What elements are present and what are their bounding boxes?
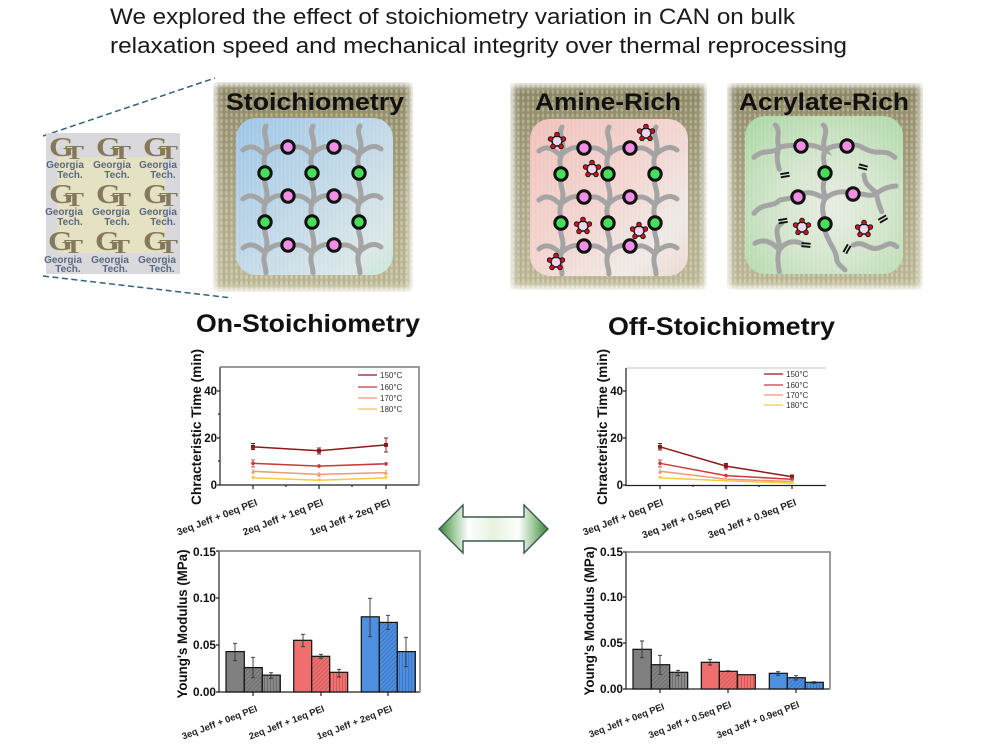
- bar chart: on-stoichiometry young's modulus: 3eq Jeff + 0eq PEI: [180, 703, 259, 742]
- legend: 150°C: [786, 370, 809, 379]
- photo: Georgia Tech logo sheet under film: Georgia: [139, 207, 177, 218]
- line chart: off-stoichiometry characteristic time: [581, 349, 826, 541]
- title: relaxation speed and mechanical integrity over thermal reprocessing: [110, 33, 847, 58]
- photo: Georgia Tech logo sheet under film: Georgia: [139, 160, 177, 171]
- bar chart: on-stoichiometry young's modulus: 0.10: [193, 591, 216, 605]
- bar chart: on-stoichiometry young's modulus: 0.00: [193, 685, 216, 699]
- photo: Georgia Tech logo sheet under film: Georgia: [93, 160, 131, 171]
- photo: Georgia Tech logo sheet under film: Georgia: [45, 207, 83, 218]
- bar chart: on-stoichiometry young's modulus: Young's Modulus (MPa): [174, 550, 190, 698]
- bar chart: off-stoichiometry young's modulus: 3eq Jeff + 0eq PEI: [587, 701, 666, 740]
- bar chart: off-stoichiometry young's modulus: 3eq Jeff + 0.9eq PEI: [715, 699, 801, 740]
- line chart: off-stoichiometry characteristic time: 3eq Jeff + 0.9eq PEI: [707, 497, 798, 541]
- line chart: on-stoichiometry characteristic time: Chracteristic Time (min): [188, 349, 204, 505]
- line chart: on-stoichiometry characteristic time: 2eq Jeff + 1eq PEI: [241, 497, 325, 538]
- bar chart: off-stoichiometry young's modulus: Young's Modulus (MPa): [581, 546, 597, 696]
- bar chart: off-stoichiometry young's modulus: 0.15: [600, 545, 623, 559]
- bar chart: on-stoichiometry young's modulus: 1eq Jeff + 2eq PEI: [315, 703, 394, 742]
- photo: Georgia Tech logo sheet under film: [44, 132, 180, 275]
- line chart: on-stoichiometry characteristic time: 3eq Jeff + 0eq PEI: [175, 497, 259, 538]
- line chart: off-stoichiometry characteristic time: 40: [610, 386, 623, 398]
- bar chart: off-stoichiometry young's modulus: 3eq Jeff + 0.5eq PEI: [647, 699, 733, 740]
- legend: 160°C: [380, 383, 403, 392]
- line chart: off-stoichiometry characteristic time: 0: [617, 480, 623, 492]
- bar chart: on-stoichiometry young's modulus: [174, 545, 420, 742]
- panel: amine-rich: Amine-Rich: [535, 89, 681, 116]
- photo: Georgia Tech logo sheet under film: Georgia: [46, 160, 84, 171]
- zoom guide lines: [43, 78, 232, 298]
- legend: 170°C: [380, 394, 403, 403]
- photo: Georgia Tech logo sheet under film: Tech.: [55, 264, 81, 275]
- line chart: on-stoichiometry characteristic time: 20: [204, 433, 217, 445]
- photo: Georgia Tech logo sheet under film: Georgia: [92, 207, 130, 218]
- bar chart: on-stoichiometry young's modulus: 0.05: [193, 638, 216, 652]
- photo: Georgia Tech logo sheet under film: Tech.: [104, 170, 130, 181]
- line chart: on-stoichiometry characteristic time: [175, 349, 419, 538]
- bar chart: off-stoichiometry young's modulus: 0.10: [600, 590, 623, 604]
- heading: on-stoichiometry: On-Stoichiometry: [196, 310, 420, 338]
- photo: Georgia Tech logo sheet under film: Georgia: [44, 255, 82, 266]
- legend: 170°C: [786, 391, 809, 400]
- bar chart: off-stoichiometry young's modulus: 0.05: [600, 636, 623, 650]
- photo: Georgia Tech logo sheet under film: Tech.: [149, 264, 175, 275]
- line chart: on-stoichiometry characteristic time: 40: [204, 386, 217, 398]
- panel: acrylate-rich: Acrylate-Rich: [739, 89, 909, 116]
- photo: Georgia Tech logo sheet under film: Tech.: [150, 217, 176, 228]
- line chart: off-stoichiometry characteristic time: 20: [610, 433, 623, 445]
- legend: 180°C: [380, 405, 403, 414]
- bar chart: off-stoichiometry young's modulus: [581, 545, 830, 740]
- photo: Georgia Tech logo sheet under film: Tech.: [104, 217, 130, 228]
- photo: Georgia Tech logo sheet under film: Tech.: [150, 170, 176, 181]
- photo: Georgia Tech logo sheet under film: Georgia: [138, 255, 176, 266]
- legend: [358, 371, 403, 414]
- double-headed arrow: [439, 505, 548, 553]
- heading: off-stoichiometry: Off-Stoichiometry: [608, 313, 835, 341]
- line chart: on-stoichiometry characteristic time: 1eq Jeff + 2eq PEI: [308, 497, 392, 538]
- photo: Georgia Tech logo sheet under film: Georgia: [91, 255, 129, 266]
- line chart: off-stoichiometry characteristic time: 3eq Jeff + 0eq PEI: [581, 497, 665, 538]
- photo: Georgia Tech logo sheet under film: Tech.: [57, 217, 83, 228]
- line chart: on-stoichiometry characteristic time: 0: [211, 480, 217, 492]
- panel: stoichiometry: [213, 82, 413, 292]
- legend: 160°C: [786, 381, 809, 390]
- bar chart: on-stoichiometry young's modulus: 0.15: [193, 545, 216, 559]
- bar chart: on-stoichiometry young's modulus: 2eq Jeff + 1eq PEI: [247, 703, 326, 742]
- photo: Georgia Tech logo sheet under film: Tech.: [102, 264, 128, 275]
- legend: 180°C: [786, 401, 809, 410]
- bar chart: off-stoichiometry young's modulus: 0.00: [600, 682, 623, 696]
- title: We explored the effect of stoichiometry variation in CAN on bulk: [110, 4, 796, 29]
- panel: acrylate-rich: [727, 83, 923, 290]
- title: [110, 4, 847, 58]
- line chart: off-stoichiometry characteristic time: Chracteristic Time (min): [594, 349, 610, 505]
- panel: amine-rich: [510, 83, 707, 290]
- legend: 150°C: [380, 371, 403, 380]
- panel: stoichiometry: Stoichiometry: [226, 89, 405, 116]
- legend: [764, 370, 809, 410]
- line chart: off-stoichiometry characteristic time: 3eq Jeff + 0.5eq PEI: [641, 497, 732, 541]
- photo: Georgia Tech logo sheet under film: Tech.: [57, 170, 83, 181]
